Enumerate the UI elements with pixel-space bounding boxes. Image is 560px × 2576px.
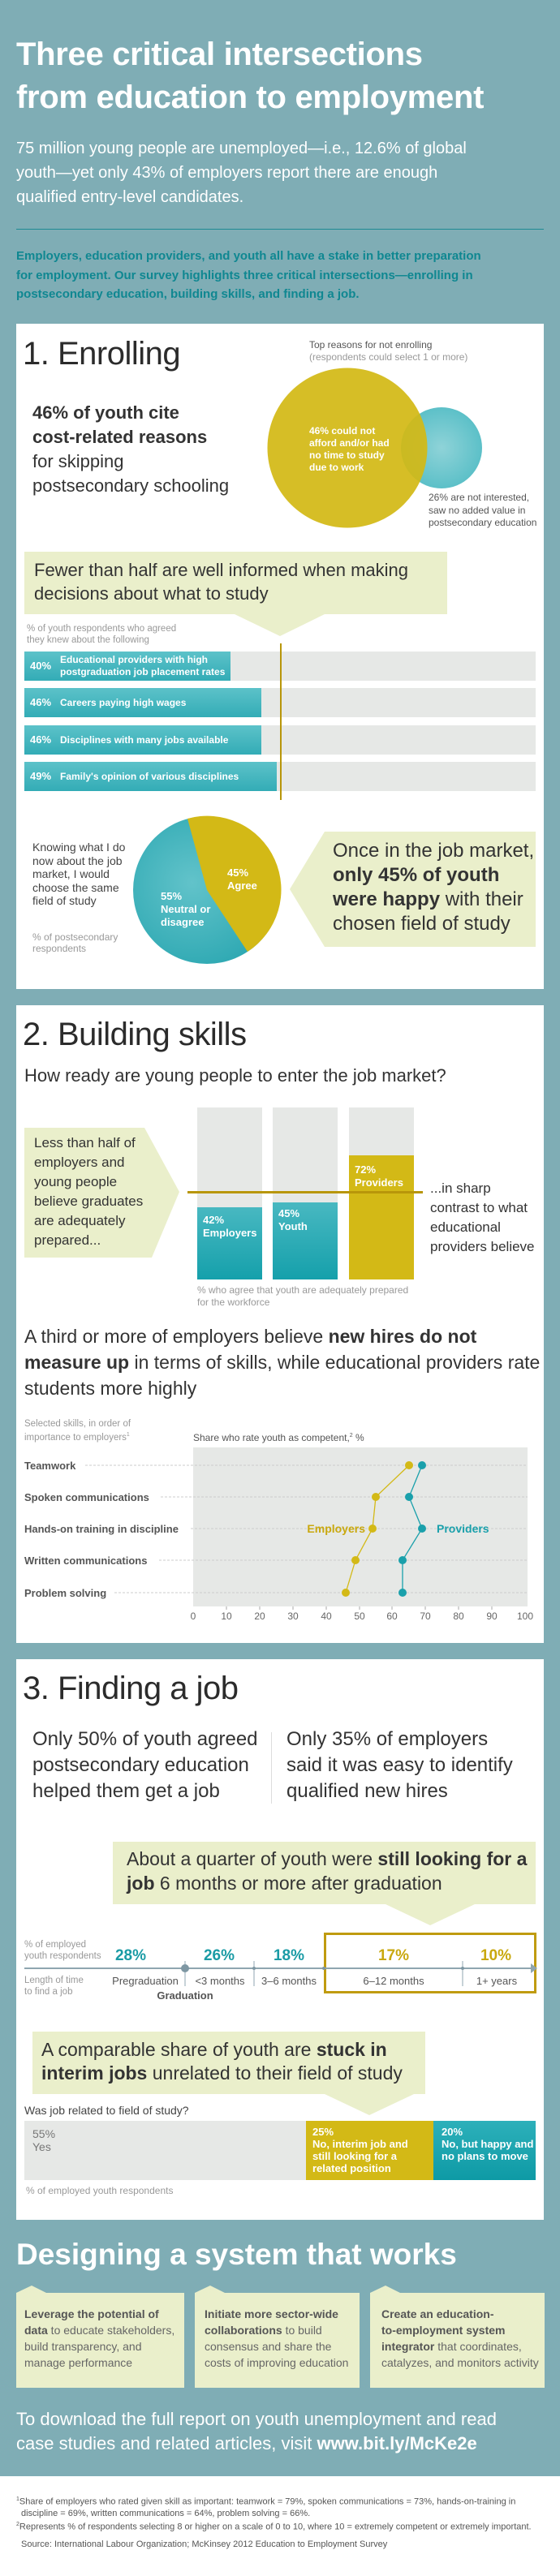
footnotes: 1Share of employers who rated given skill as important: teamwork = 79%, spoken communications = 73%, hands-on-training in discipline = 69%, written communications = 64%, problem solving = 66%. bbox=[16, 2496, 515, 2518]
venn label: 26%: 26% are not interested, bbox=[429, 492, 529, 503]
stacked bar: related position bbox=[312, 2162, 391, 2174]
callout: interim jobs: A comparable share of youth are stuck in interim jobs unrelated to their field of study bbox=[41, 2039, 403, 2084]
heading: 1. Enrolling: 1. Enrolling bbox=[23, 336, 180, 372]
stat: 35% employers: Only 35% of employers bbox=[286, 1728, 488, 1750]
dot chart: skills: Teamwork bbox=[24, 1460, 76, 1472]
caption: skills: importance to employers1 bbox=[24, 1432, 130, 1443]
card: integrator: integrator that coordinates, bbox=[381, 2340, 522, 2353]
card: collaborations: costs of improving education bbox=[205, 2356, 348, 2369]
stacked bar: no plans to move bbox=[442, 2150, 528, 2162]
caption: bars bbox=[27, 624, 176, 645]
venn label: 26%: saw no added value in bbox=[429, 505, 525, 516]
caption: readiness: for the workforce bbox=[197, 1297, 269, 1308]
card: collaborations: collaborations to build bbox=[205, 2324, 322, 2337]
big stat text: for skipping bbox=[32, 451, 124, 471]
timeline chart: Pregraduation bbox=[112, 1975, 179, 1987]
stat: 35% employers: said it was easy to identify bbox=[286, 1754, 513, 1776]
pie chart bbox=[133, 816, 281, 964]
text: sharp contrast bbox=[430, 1180, 535, 1254]
text: sharp contrast: contrast to what bbox=[430, 1200, 528, 1215]
venn label: 46% bbox=[309, 425, 390, 473]
title: from education to employment bbox=[16, 80, 484, 115]
stat: 50% youth: helped them get a job bbox=[32, 1780, 220, 1802]
dot chart: skills: 10 bbox=[221, 1611, 232, 1622]
title: Three critical intersections bbox=[16, 37, 423, 72]
pie chart text: now about the job bbox=[32, 854, 123, 867]
timeline chart bbox=[24, 1933, 537, 2002]
card: data bbox=[16, 2286, 184, 2388]
dot chart: skills: Spoken communications bbox=[24, 1491, 149, 1503]
bar chart: informed: 40% bbox=[30, 660, 51, 672]
venn label: 46%: afford and/or had bbox=[309, 437, 390, 449]
caption: skills bbox=[24, 1419, 131, 1443]
subtitle: qualified entry-level candidates. bbox=[16, 188, 243, 206]
dot chart: skills: Problem solving bbox=[24, 1587, 106, 1599]
callout: less than half bbox=[24, 1128, 179, 1258]
pie label: neutral bbox=[161, 890, 211, 928]
timeline chart: Graduation bbox=[157, 1989, 213, 2002]
bar chart: informed: Educational providers with high bbox=[60, 654, 208, 665]
venn caption: (respondents could select 1 or more) bbox=[309, 351, 467, 363]
timeline chart: % of employed bbox=[24, 1940, 86, 1950]
intro text: Employers, education providers, and youth all have a stake in better preparation bbox=[16, 249, 481, 263]
stat: 35% employers bbox=[286, 1728, 513, 1802]
dot chart: skills: 40 bbox=[321, 1611, 332, 1622]
stacked bar: 20% bbox=[442, 2126, 463, 2138]
dot chart: skills: 60 bbox=[386, 1611, 398, 1622]
download text: case studies and related articles, visit www.bit.ly/McKe2e bbox=[16, 2433, 477, 2453]
pie label: agree bbox=[227, 867, 257, 892]
footnotes: Source: International Labour Organization; McKinsey 2012 Education to Employment Survey bbox=[21, 2539, 387, 2549]
venn caption: Top reasons for not enrolling bbox=[309, 339, 432, 350]
caption: readiness: % who agree that youth are adequately prepared bbox=[197, 1284, 408, 1296]
card: collaborations: Initiate more sector-wide bbox=[205, 2307, 338, 2320]
timeline chart: 26% bbox=[204, 1947, 235, 1964]
card: integrator bbox=[370, 2286, 545, 2388]
panel: building skills bbox=[16, 1005, 544, 1643]
caption: bars: they knew about the following bbox=[27, 635, 149, 645]
title bbox=[16, 37, 484, 115]
callout: interim jobs bbox=[32, 2032, 425, 2115]
caption: skills: Selected skills, in order of bbox=[24, 1419, 131, 1429]
card: data: build transparency, and bbox=[24, 2340, 141, 2353]
bar chart: informed: 46% bbox=[30, 696, 51, 708]
venn label: 26%: postsecondary education bbox=[429, 517, 536, 528]
callout: fewer than half: Fewer than half are well informed when making decisions about what to study bbox=[34, 560, 408, 604]
pie label: neutral: 55% bbox=[161, 890, 182, 902]
heading: 3. Finding a job: 3. Finding a job bbox=[23, 1671, 239, 1706]
dot chart: skills: 50 bbox=[354, 1611, 365, 1622]
card: collaborations: consensus and share the bbox=[205, 2340, 331, 2353]
bar chart: informed: postgraduation job placement rates bbox=[60, 666, 225, 677]
download text bbox=[16, 2409, 497, 2453]
download text: To download the full report on youth unemployment and read bbox=[16, 2409, 497, 2429]
callout: less than half: prepared... bbox=[34, 1232, 101, 1248]
callout: less than half: young people bbox=[34, 1174, 117, 1189]
caption: % of employed youth respondents bbox=[26, 2185, 173, 2196]
bar chart: readiness: Employers bbox=[203, 1227, 256, 1239]
venn diagram bbox=[268, 368, 482, 527]
panel: finding a job bbox=[16, 1659, 544, 2220]
callout: fewer than half bbox=[24, 552, 447, 636]
pie chart text: market, I would bbox=[32, 867, 110, 880]
dot chart: skills: Written communications bbox=[24, 1555, 147, 1567]
bar chart: readiness: Providers bbox=[355, 1176, 403, 1189]
subtitle: youth—yet only 43% of employers report there are enough bbox=[16, 164, 437, 182]
stacked bar: 55% bbox=[32, 2127, 55, 2140]
card: data: manage performance bbox=[24, 2356, 132, 2369]
pie chart text: field of study bbox=[32, 894, 97, 907]
dot chart: skills bbox=[24, 1447, 533, 1622]
bar chart: readiness: 42% bbox=[203, 1214, 224, 1226]
bar chart: informed: 46% bbox=[30, 733, 51, 746]
card: data: Leverage the potential of bbox=[24, 2307, 159, 2320]
text: sharp contrast: educational bbox=[430, 1219, 501, 1235]
pie label: neutral: disagree bbox=[161, 916, 204, 928]
card: data: data to educate stakeholders, bbox=[24, 2324, 174, 2337]
pie label: agree: Agree bbox=[227, 879, 257, 892]
timeline chart: Length of time bbox=[24, 1976, 84, 1985]
heading: designing a system: Designing a system that works bbox=[16, 2238, 457, 2271]
subtitle: 75 million young people are unemployed—i.e., 12.6% of global bbox=[16, 140, 467, 157]
text: sharp contrast: providers believe bbox=[430, 1239, 535, 1254]
footnotes bbox=[16, 2496, 532, 2549]
pie caption bbox=[32, 931, 118, 954]
timeline chart: 1+ years bbox=[476, 1975, 518, 1987]
card: integrator: Create an education- bbox=[381, 2307, 493, 2320]
card: collaborations bbox=[195, 2286, 360, 2388]
bar chart: readiness: 72% bbox=[355, 1163, 376, 1176]
dot chart: skills: Providers bbox=[437, 1522, 489, 1535]
bar chart: informed bbox=[24, 643, 536, 800]
dot chart: skills: 70 bbox=[420, 1611, 431, 1622]
subheading: How ready are young people to enter the job market? bbox=[24, 1065, 446, 1086]
intro text: postsecondary education, building skills, and finding a job. bbox=[16, 287, 360, 301]
dot chart: skills: 30 bbox=[287, 1611, 299, 1622]
callout: less than half: Less than half of bbox=[34, 1135, 136, 1150]
big stat text: cost-related reasons bbox=[32, 427, 207, 447]
card: integrator: catalyzes, and monitors activity bbox=[381, 2356, 539, 2369]
stacked bar: No, interim job and bbox=[312, 2138, 408, 2150]
pie caption: respondents bbox=[32, 943, 86, 954]
venn label: 46%: no time to study bbox=[309, 449, 385, 461]
callout: less than half: employers and bbox=[34, 1155, 125, 1170]
stat: 35% employers: qualified new hires bbox=[286, 1780, 448, 1802]
bar chart: readiness: 45% bbox=[278, 1207, 299, 1219]
bar chart: informed: Disciplines with many jobs available bbox=[60, 734, 228, 746]
footnotes: 2Represents % of respondents selecting 8 or higher on a scale of 0 to 10, where 10 = extremely competent or extremely important. bbox=[16, 2522, 532, 2531]
pie caption: % of postsecondary bbox=[32, 931, 118, 943]
venn label: 46%: due to work bbox=[309, 462, 364, 473]
bar chart: informed: 49% bbox=[30, 770, 51, 782]
bar chart: informed: Careers paying high wages bbox=[60, 697, 186, 708]
callout: still looking: About a quarter of youth were still looking for a job 6 months or more after graduation bbox=[127, 1848, 527, 1894]
callout: still looking bbox=[113, 1842, 536, 1925]
pie chart text bbox=[32, 841, 125, 907]
caption: share: Share who rate youth as competent,2 % bbox=[193, 1432, 364, 1443]
timeline chart: 10% bbox=[480, 1947, 511, 1964]
stacked bar bbox=[24, 2121, 536, 2180]
pie label: neutral: Neutral or bbox=[161, 903, 210, 915]
big stat text: 46% of youth cite bbox=[32, 402, 179, 423]
pie chart text: choose the same bbox=[32, 881, 119, 894]
heading: 2. Building skills: 2. Building skills bbox=[23, 1017, 247, 1052]
timeline chart: 6–12 months bbox=[363, 1975, 424, 1987]
cards: recommendations bbox=[16, 2286, 545, 2388]
stacked bar: Yes bbox=[32, 2140, 51, 2153]
timeline chart: 17% bbox=[378, 1947, 409, 1964]
venn caption bbox=[309, 339, 467, 363]
dot chart: skills: 100 bbox=[517, 1611, 533, 1622]
stat: 50% youth: postsecondary education bbox=[32, 1754, 249, 1776]
intro text bbox=[16, 249, 481, 301]
card: integrator: to-employment system bbox=[381, 2324, 505, 2337]
callout: less than half: are adequately bbox=[34, 1213, 125, 1228]
text: sharp contrast: ...in sharp bbox=[430, 1180, 491, 1196]
panel: enrolling bbox=[16, 324, 544, 989]
big stat text: postsecondary schooling bbox=[32, 475, 229, 496]
heading: new hires: A third or more of employers believe new hires do not measure up in terms of skills, while educational providers rate students more highly bbox=[24, 1326, 540, 1399]
bar chart: informed: Family's opinion of various disciplines bbox=[60, 771, 239, 782]
stat: 50% youth bbox=[32, 1728, 258, 1802]
pie label: agree: 45% bbox=[227, 867, 248, 879]
timeline chart: 28% bbox=[115, 1947, 146, 1964]
timeline chart: <3 months bbox=[195, 1975, 245, 1987]
timeline chart: 18% bbox=[274, 1947, 304, 1964]
stat: 50% youth: Only 50% of youth agreed bbox=[32, 1728, 258, 1750]
caption: readiness bbox=[197, 1284, 408, 1308]
subtitle bbox=[16, 140, 467, 206]
dot chart: skills: Hands-on training in discipline bbox=[24, 1523, 179, 1535]
caption: bars: % of youth respondents who agreed bbox=[27, 624, 176, 634]
big stat text bbox=[32, 402, 229, 496]
callout: less than half: believe graduates bbox=[34, 1193, 143, 1209]
venn label: 26% bbox=[429, 492, 536, 528]
bar chart: readiness: Youth bbox=[278, 1220, 308, 1232]
dot chart: skills: 20 bbox=[254, 1611, 265, 1622]
pie chart text: Knowing what I do bbox=[32, 841, 125, 854]
dot chart: skills: 0 bbox=[191, 1611, 196, 1622]
callout: only 45% happy bbox=[290, 832, 536, 947]
dot chart: skills: 90 bbox=[486, 1611, 498, 1622]
stacked bar: 25% bbox=[312, 2126, 334, 2138]
bar chart: readiness bbox=[187, 1107, 423, 1279]
dot chart: skills: Employers bbox=[307, 1522, 365, 1535]
timeline chart: youth respondents bbox=[24, 1951, 101, 1961]
venn label: 46%: 46% could not bbox=[309, 425, 375, 437]
dot chart: skills: 80 bbox=[453, 1611, 464, 1622]
intro text: for employment. Our survey highlights three critical intersections—enrolling in bbox=[16, 268, 473, 282]
timeline chart: 3–6 months bbox=[261, 1975, 317, 1987]
callout: only 45% happy: Once in the job market, only 45% of youth were happy with their chosen field of study bbox=[333, 840, 534, 935]
question: Was job related to field of study? bbox=[24, 2104, 189, 2117]
stacked bar: No, but happy and bbox=[442, 2138, 533, 2150]
timeline chart: to find a job bbox=[24, 1987, 72, 1997]
stacked bar: still looking for a bbox=[312, 2150, 397, 2162]
